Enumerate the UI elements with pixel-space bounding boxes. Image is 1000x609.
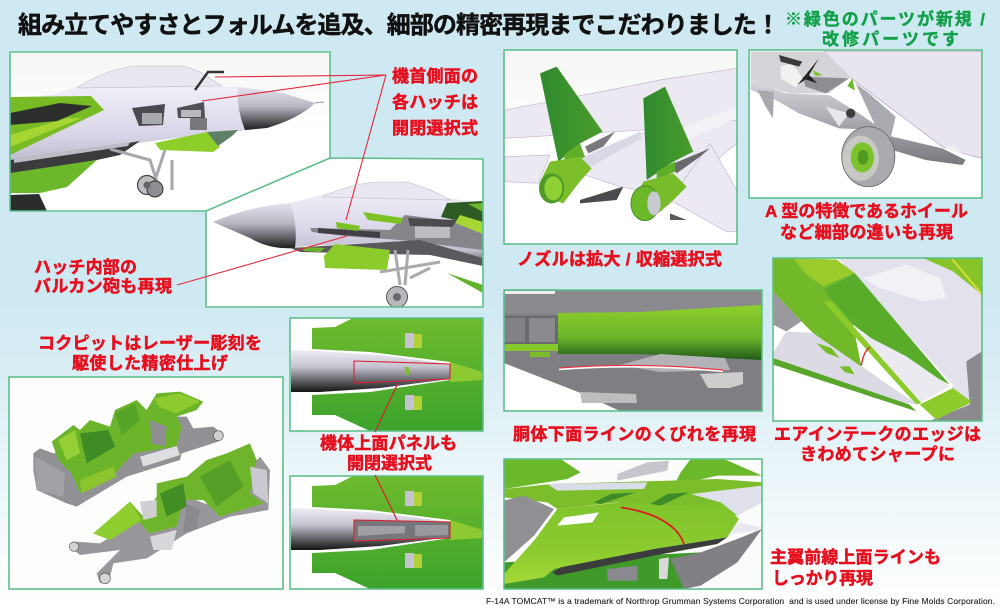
lower tub	[69, 443, 270, 584]
label: intake: きわめてシャープに	[800, 445, 955, 464]
label: top panel: 開閉選択式	[347, 454, 432, 473]
wing underside	[824, 52, 982, 158]
label: top panel	[320, 434, 457, 473]
label: top panel: 機体上面パネルも	[320, 434, 457, 453]
label: cockpit: コクピットはレーザー彫刻を	[38, 334, 262, 353]
red highlight box	[354, 361, 450, 383]
panel: air intake	[773, 258, 982, 421]
green lumps	[504, 459, 581, 489]
green wing gloves	[312, 318, 483, 431]
label: wing	[770, 548, 941, 588]
label: wing: しっかり再現	[772, 569, 873, 588]
wheel	[842, 127, 895, 187]
green rear intake	[441, 201, 482, 222]
green intake	[10, 96, 104, 155]
missile pylon	[781, 63, 804, 87]
panel: cockpit tubs	[9, 377, 283, 589]
canopy	[78, 66, 222, 88]
lavender deck	[838, 258, 982, 421]
note: green parts: ※緑色のパーツが新規 /	[785, 9, 985, 29]
label: hatches: 機首側面の	[392, 66, 478, 86]
label: hatches: 各ハッチは	[392, 92, 478, 112]
green gear door	[155, 132, 220, 152]
canopy	[617, 461, 669, 481]
left underside	[773, 331, 918, 405]
grey engine	[504, 496, 554, 562]
label: cockpit	[38, 334, 262, 373]
callout lines: hatches	[202, 75, 386, 220]
tyre shadow	[10, 194, 47, 211]
panel: top view closed	[290, 318, 483, 431]
radome	[238, 87, 315, 130]
upper bay	[751, 52, 851, 93]
label: vulcan cannon	[34, 258, 172, 296]
panel: nose side closed	[10, 52, 330, 211]
label: vulcan cannon: ハッチ内部の	[34, 258, 137, 277]
upper tub	[33, 392, 223, 507]
gun bay	[310, 215, 483, 250]
green fuselage	[558, 305, 762, 360]
landing gear	[110, 149, 172, 190]
panel: top view open	[290, 476, 483, 589]
landing gear	[380, 250, 440, 285]
red highlight box	[354, 520, 450, 541]
panel: wing	[504, 459, 762, 589]
rear fuselage and nose body	[10, 86, 290, 160]
nozzle left	[564, 144, 585, 160]
label: hatches	[392, 66, 478, 138]
note: green parts	[785, 9, 985, 49]
panel: belly	[504, 290, 762, 411]
fuselage	[290, 192, 482, 258]
mid band	[504, 479, 762, 516]
label: belly: 胴体下面ラインのくびれを再現	[513, 425, 756, 444]
green wedge	[823, 273, 950, 385]
white panel	[557, 512, 599, 526]
panel: nozzles	[504, 50, 737, 244]
label: wheel: A 型の特徴であるホイール	[765, 202, 968, 221]
green hatches	[336, 222, 360, 231]
left hatch	[505, 316, 558, 344]
grey left detail	[773, 291, 801, 331]
panel: nose side open	[206, 159, 483, 308]
engine bodies	[580, 132, 642, 168]
label: intake	[774, 425, 981, 464]
dark leading edge	[552, 537, 727, 576]
label: hatches: 開閉選択式	[392, 119, 478, 138]
callout lines: top panel	[375, 383, 398, 520]
label: vulcan cannon: バルカン砲も再現	[34, 277, 172, 296]
green body	[773, 258, 916, 405]
grey side	[930, 351, 982, 421]
label: wheel	[765, 202, 968, 242]
hatches	[405, 491, 414, 506]
open hatches	[132, 104, 165, 126]
open bay	[354, 520, 450, 541]
fuselage pod	[751, 78, 966, 165]
label: nozzle: ノズルは拡大 / 収縮選択式	[517, 249, 722, 269]
callout line: vulcan	[177, 236, 347, 285]
label: wheel: など細部の違いも再現	[780, 222, 953, 242]
lower green lip	[920, 388, 972, 420]
red edge mark	[861, 347, 870, 365]
gear detail	[607, 566, 637, 581]
under detail	[620, 354, 730, 372]
red contour line	[559, 366, 723, 371]
radome	[213, 203, 296, 248]
wing	[504, 502, 739, 584]
tail fins	[540, 67, 603, 162]
label: cockpit: 駆使した精密仕上げ	[72, 354, 228, 373]
footer credit: F-14A TOMCAT™ is a trademark of Northrop Grumman Systems Corporation and is used under license by Fine Molds Corporation.	[486, 596, 995, 606]
white background	[504, 363, 620, 411]
green gear door	[324, 244, 390, 270]
lower dark green	[504, 552, 701, 589]
wings	[505, 68, 737, 232]
frame: joined nose panels with diagonal	[10, 52, 483, 307]
red contour	[621, 507, 684, 544]
note: green parts: 改修パーツです	[822, 29, 959, 49]
title: 組み立てやすさとフォルムを追及、細部の精密再現までこだわりました！	[18, 12, 780, 39]
hatches	[405, 333, 414, 348]
label: wing: 主翼前線上面ラインも	[770, 548, 941, 567]
lower rear	[10, 141, 140, 174]
label: intake: エアインテークのエッジは	[774, 425, 981, 444]
intake white panel	[851, 328, 950, 403]
fuselage	[291, 508, 450, 550]
panel: wheel	[749, 50, 982, 198]
right engine	[671, 529, 762, 589]
fuselage	[291, 350, 450, 392]
green wing gloves	[312, 476, 483, 589]
top grey	[504, 290, 762, 314]
canopy	[322, 182, 450, 200]
nozzle right	[657, 162, 675, 180]
lower body	[290, 240, 483, 266]
gear strut	[856, 83, 896, 138]
canopy rail probe	[195, 72, 224, 90]
